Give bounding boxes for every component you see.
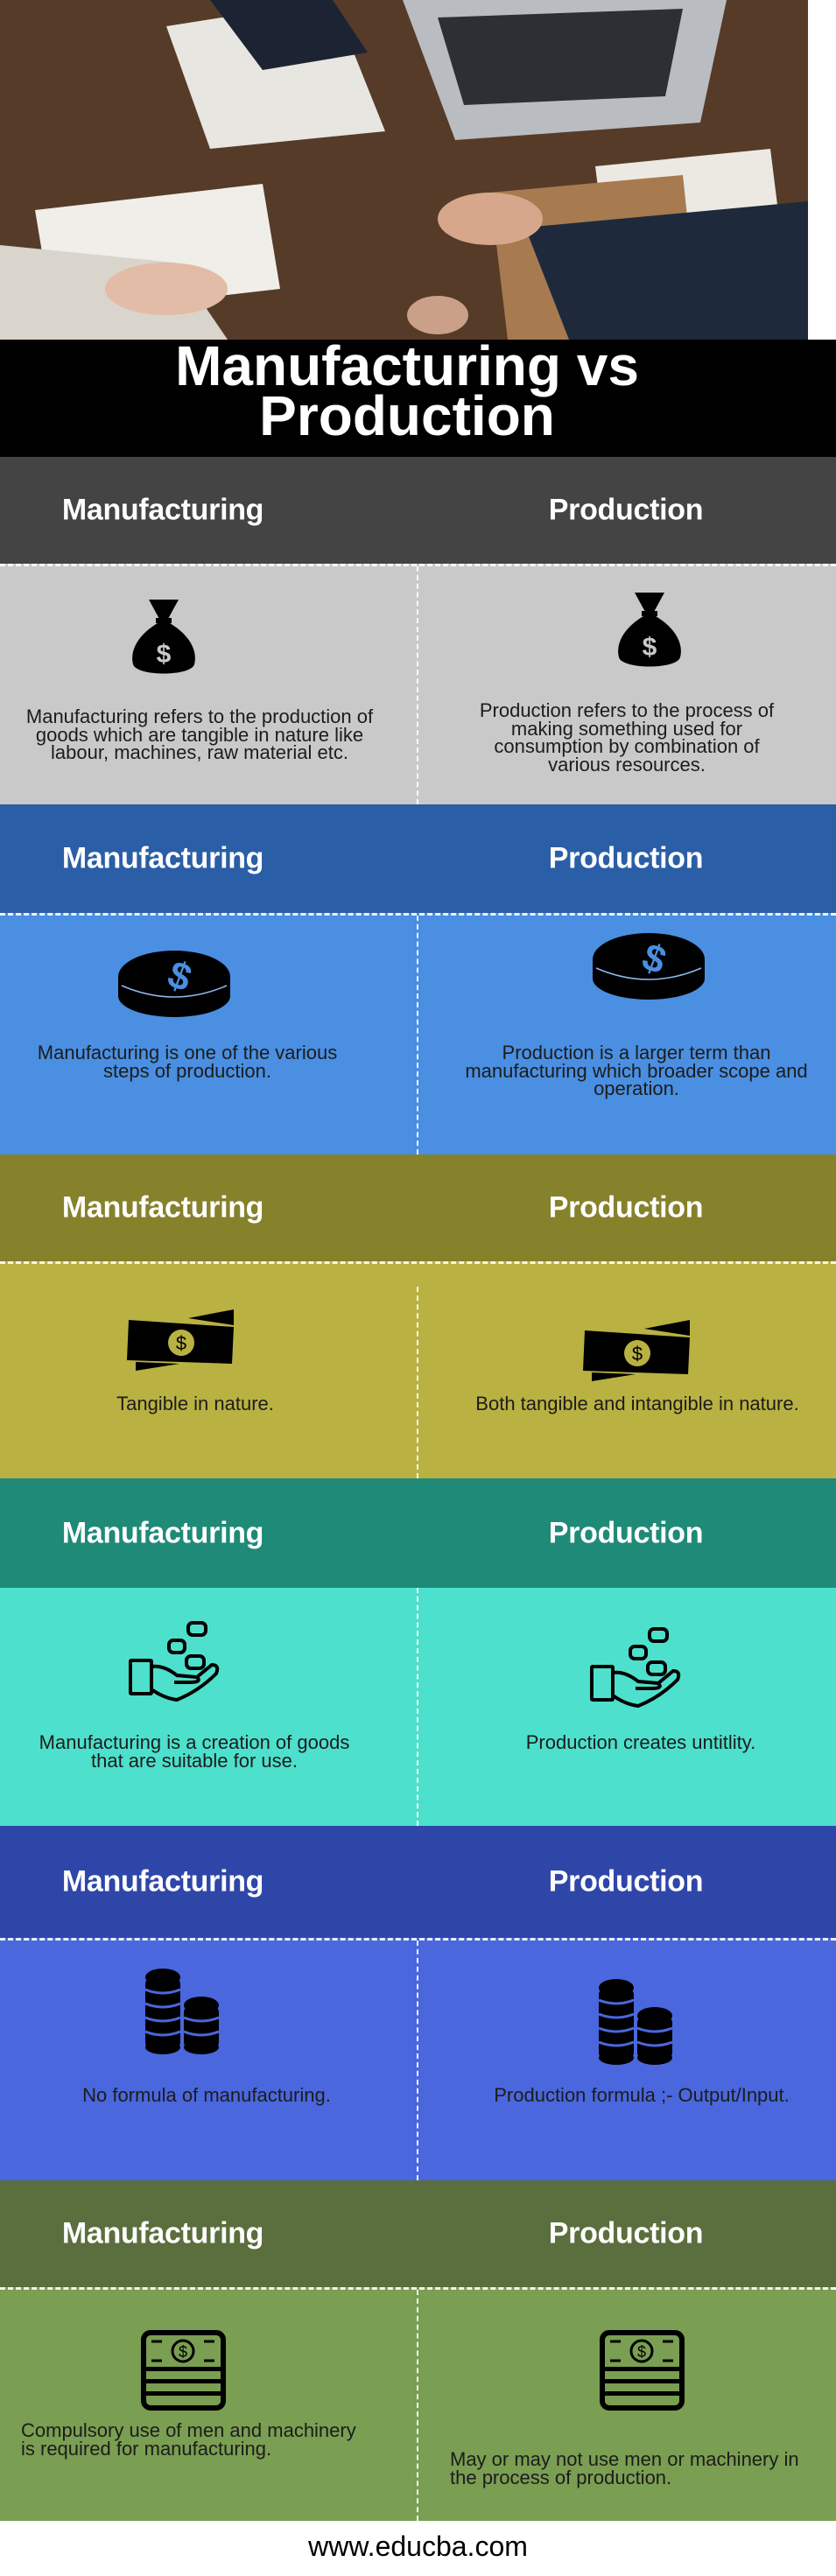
body row 1 (0, 564, 836, 804)
text: manufacturing definition: Manufacturing refers to the production of (26, 705, 373, 727)
text: production definition: various resources. (548, 753, 706, 776)
icon: cash stack right (600, 2330, 685, 2411)
header row 3 (0, 1155, 836, 1261)
title: Production (259, 384, 555, 447)
text: compulsory use: is required for manufacturing. (21, 2437, 271, 2460)
text: production definition: making something used for (511, 718, 742, 739)
header row 3: Manufacturing (62, 1190, 263, 1224)
text: creation of goods: Manufacturing is a creation of goods (39, 1731, 349, 1753)
text: compulsory use: Compulsory use of men and machinery (21, 2419, 356, 2441)
text: production definition: Production refers to the process of (480, 699, 774, 721)
text: production larger term: Production is a larger term than (502, 1042, 770, 1063)
icon: hand with coins left (129, 1621, 219, 1702)
text: may or may not (450, 2448, 799, 2488)
icon: cash stack right: $ (637, 2343, 646, 2361)
text: manufacturing definition (26, 705, 373, 763)
header row 1: Production (549, 494, 703, 527)
icon: coin left (118, 951, 230, 1017)
header row 5: Production (549, 1864, 703, 1898)
icon: money bag left: $ (157, 640, 172, 669)
text: manufacturing step (38, 1042, 337, 1082)
text: production larger term (465, 1042, 808, 1099)
icon: money bag right (618, 593, 681, 667)
body row 3 (0, 1261, 836, 1478)
text: creation of goods: that are suitable for use. (91, 1749, 298, 1772)
icon: coin stacks right (599, 1979, 672, 2065)
text: tangible and intangible: Both tangible and intangible in nature. (475, 1393, 799, 1414)
text: manufacturing definition: goods which are tangible in nature like (36, 723, 363, 746)
header row 4: Manufacturing (62, 1516, 263, 1549)
body row 4 (0, 1588, 836, 1826)
text: production larger term: operation. (594, 1077, 679, 1099)
body row 2 (0, 913, 836, 1155)
title: Manufacturing vs (175, 334, 639, 397)
icon: bills left (127, 1309, 234, 1371)
header row 4 (0, 1478, 836, 1588)
header row 6: Production (549, 2216, 703, 2250)
header row 3: Production (549, 1190, 703, 1224)
header row 2: Manufacturing (62, 842, 263, 875)
text: tangible: Tangible in nature. (116, 1393, 274, 1414)
icon: cash stack left: $ (179, 2343, 187, 2361)
footer: website: www.educba.com (308, 2530, 528, 2562)
text: may or may not: May or may not use men or machinery in (450, 2448, 799, 2470)
header row 1: Manufacturing (62, 494, 263, 527)
icon: bills right: $ (632, 1343, 643, 1365)
title (0, 340, 836, 457)
text: manufacturing definition: labour, machines, raw material etc. (51, 741, 348, 763)
icon: coin right: $ (636, 935, 671, 983)
body row 6 (0, 2287, 836, 2521)
header row 5: Manufacturing (62, 1864, 263, 1898)
text: manufacturing step: steps of production. (103, 1059, 271, 1082)
body row 5 (0, 1938, 836, 2180)
text: no formula: No formula of manufacturing. (82, 2084, 331, 2106)
text: manufacturing step: Manufacturing is one of the various (38, 1042, 337, 1063)
icon: bills left: $ (176, 1332, 186, 1354)
text: compulsory use (21, 2419, 356, 2460)
text: production larger term: manufacturing which broader scope and (465, 1059, 808, 1082)
text: creates utility: Production creates untitlity. (526, 1731, 755, 1753)
header row 2: Production (549, 842, 703, 875)
photo: business handshake (0, 0, 808, 340)
icon: money bag right: $ (643, 633, 657, 662)
icon: money bag left (132, 600, 195, 674)
icon: bills right (583, 1320, 690, 1381)
header row 4: Production (549, 1516, 703, 1549)
text: may or may not: the process of production. (450, 2467, 671, 2488)
icon: coin left: $ (162, 952, 197, 1000)
text: production definition: consumption by combination of (494, 735, 760, 757)
header row 1 (0, 457, 836, 564)
icon: coin stacks left (145, 1969, 219, 2054)
icon: coin right (593, 933, 705, 1000)
text: creation of goods (39, 1731, 349, 1772)
header row 2 (0, 804, 836, 913)
text: production formula: Production formula ;- Output/Input. (494, 2084, 790, 2106)
header row 5 (0, 1826, 836, 1938)
icon: cash stack left (141, 2330, 226, 2411)
text: production definition (480, 699, 774, 776)
header row 6: Manufacturing (62, 2216, 263, 2250)
icon: hand with coins right (590, 1627, 681, 1708)
header row 6 (0, 2180, 836, 2287)
